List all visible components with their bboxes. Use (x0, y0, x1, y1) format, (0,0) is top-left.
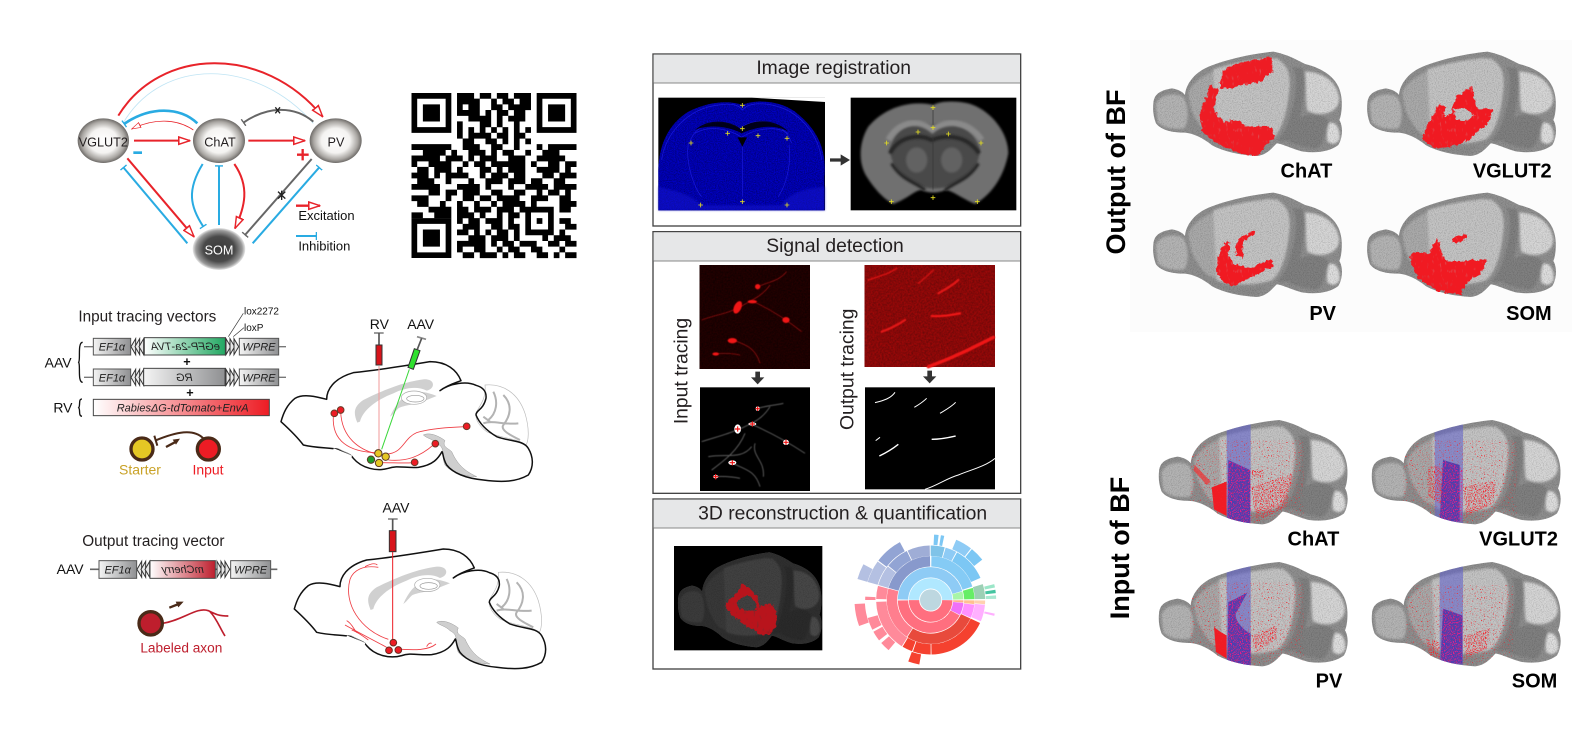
heading: input of BF: Input of BF (1105, 477, 1135, 619)
network connections (118, 63, 323, 243)
QR code (410, 91, 578, 260)
node: SOM (193, 228, 245, 270)
legend: inhibition: Inhibition (298, 238, 350, 253)
output brain: PV (1153, 193, 1342, 325)
vector row 2: RG (176, 372, 193, 384)
heading: output tracing vector: Output tracing vector (82, 533, 224, 550)
input brain: ChAT (1159, 420, 1348, 551)
syringe labels: AAV (407, 316, 435, 332)
arrow (923, 371, 936, 383)
header: Image registration (756, 58, 911, 79)
vector row 2: EF1α (99, 372, 126, 384)
starter and input cells: Input (192, 461, 224, 477)
input brain: SOM: SOM (1512, 671, 1557, 693)
heading: output of BF: Output of BF (1101, 90, 1131, 254)
output brain: SOM (1367, 193, 1556, 325)
label: input tracing: Input tracing (671, 318, 692, 424)
panel: signal detection (653, 232, 1021, 493)
output brain: ChAT (1153, 52, 1342, 182)
labeled axon cell: Labeled axon (140, 641, 222, 656)
RV construct (93, 399, 269, 416)
blue stained section (658, 98, 825, 210)
label: lox sites: loxP (244, 323, 264, 334)
vector construct: mCherry (160, 564, 204, 576)
RV brace: RV (53, 399, 73, 415)
arrow (830, 154, 850, 166)
red input neurons (331, 407, 470, 466)
brain diagram: input tracing injection (281, 316, 532, 481)
panel: output tracing vector (57, 533, 277, 656)
vector construct: WPRE (234, 564, 268, 576)
sunburst chart (840, 509, 1022, 691)
AAV label: AAV (57, 561, 84, 577)
plus sign (297, 149, 309, 160)
AAV brace: AAV (45, 355, 72, 371)
input brain: ChAT: ChAT (1288, 529, 1339, 551)
input brain: PV (1159, 562, 1348, 693)
plus 1: + (183, 355, 191, 369)
node: VGLUT2: VGLUT2 (79, 136, 128, 150)
output injection and axons (345, 500, 436, 654)
output brain: VGLUT2: VGLUT2 (1473, 160, 1552, 182)
output of BF background (1130, 40, 1572, 332)
RV brace (53, 399, 82, 416)
syringe (388, 519, 398, 642)
node: PV (310, 118, 362, 163)
red axon projections (345, 564, 436, 650)
starter and input cells: Starter (119, 461, 161, 477)
yellow landmarks atlas (884, 105, 983, 204)
syringe labels: RV (370, 316, 390, 332)
legend: excitation: Excitation (298, 208, 355, 223)
input brain: VGLUT2 (1372, 420, 1561, 551)
panel: input tracing vectors (45, 306, 286, 477)
input brain: SOM (1372, 562, 1561, 693)
yellow landmarks blue (689, 103, 789, 207)
label: lox sites: lox2272 (244, 306, 279, 317)
input detected image (700, 387, 810, 491)
header (654, 500, 1020, 528)
vector construct (90, 561, 277, 578)
minus sign (133, 151, 142, 154)
x mark diagonal (278, 191, 285, 200)
RV syringe (374, 333, 384, 452)
output raw image (865, 265, 995, 367)
labeled axon cell (139, 602, 228, 656)
label: lox sites (228, 306, 279, 337)
vector row 2 (84, 368, 286, 386)
panel: image registration (653, 54, 1021, 226)
header: Signal detection (766, 236, 904, 257)
red neurons (386, 639, 402, 654)
output brain: ChAT: ChAT (1281, 160, 1332, 182)
label: output tracing: Output tracing (837, 309, 858, 430)
node: ChAT: ChAT (204, 136, 236, 150)
vector construct: EF1α (104, 564, 132, 576)
AAV label: AAV (383, 500, 410, 516)
brain diagram: output tracing injection (294, 549, 546, 669)
x mark top (275, 107, 280, 113)
vector row 2: WPRE (243, 372, 276, 384)
starter and input cells (119, 432, 224, 477)
output brain: PV: PV (1309, 303, 1337, 325)
starter neurons (367, 450, 389, 467)
AAV syringe (382, 337, 426, 449)
panel: 3D reconstruction and quantification (653, 499, 1022, 691)
vector row 1 (84, 338, 286, 355)
vector row 1: EF1α (99, 342, 126, 354)
reference atlas section (851, 98, 1016, 210)
arrow (751, 372, 764, 384)
output brain: SOM: SOM (1506, 303, 1552, 325)
input brain: VGLUT2: VGLUT2 (1479, 529, 1558, 551)
output brain: VGLUT2 (1367, 52, 1556, 182)
vector row 1: eGFP-2a-TVA (151, 341, 220, 353)
input projections (333, 412, 465, 463)
input brain: PV: PV (1316, 671, 1343, 693)
panel: cell-type connectivity network (78, 63, 362, 270)
node: SOM: SOM (205, 244, 233, 258)
node: VGLUT2 (78, 118, 129, 163)
input raw image (700, 265, 810, 369)
RV construct: RabiesΔG-tdTomato+EnvA (117, 403, 249, 415)
plus 2: + (186, 386, 194, 400)
node: PV: PV (328, 136, 345, 150)
output detected image (865, 387, 995, 489)
vector row 1: WPRE (243, 342, 276, 354)
header (654, 232, 1020, 261)
header: 3D reconstruction & quantification (698, 504, 987, 525)
header (654, 55, 1020, 83)
heading: input tracing vectors: Input tracing vectors (78, 309, 217, 326)
AAV brace (45, 342, 83, 382)
3D reconstruction image (674, 546, 822, 650)
node: ChAT (193, 118, 245, 163)
syringe labels (370, 316, 435, 332)
